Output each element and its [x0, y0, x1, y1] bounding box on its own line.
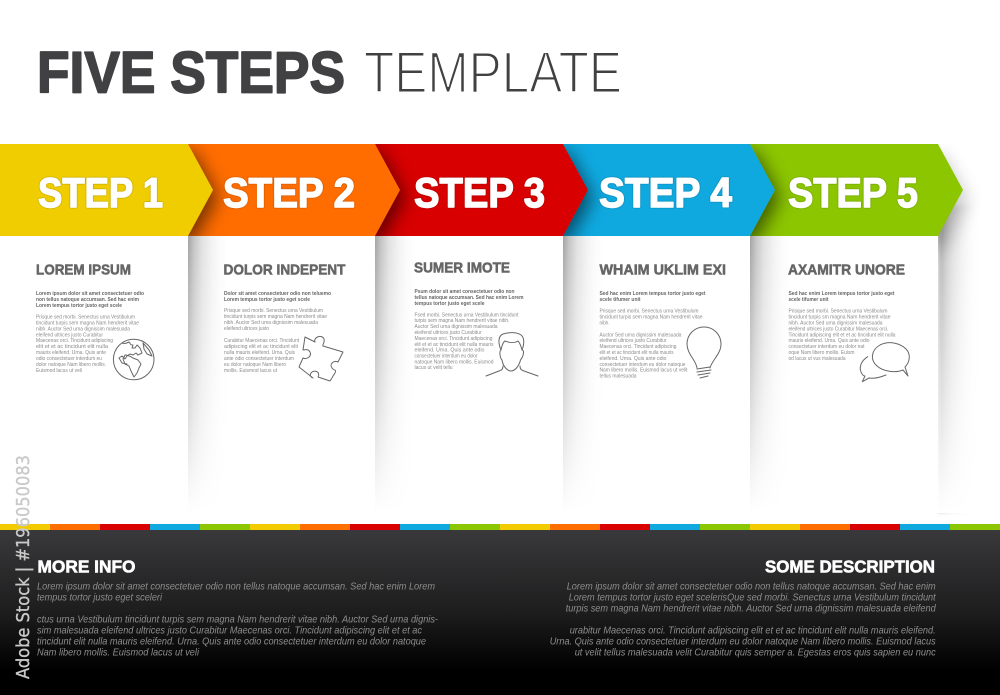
text block: more info: Lorem ipsum dolor sit amet consectetuer odio non tellus natoque accumsan. Sed hac enim Lorem	[37, 580, 435, 592]
vertical stock label: Adobe Stock | #196050083	[13, 455, 34, 679]
title: TEMPLATE	[364, 40, 622, 106]
text block: step 3: turpis sem magna Nam hendrerit vitae nibh.	[414, 318, 510, 324]
text block: step 4: nibh.	[600, 320, 610, 326]
text block: step 2: Dolor sit amet consectetuer odio non teluemo	[224, 291, 332, 297]
panel: step 3 content	[414, 260, 538, 376]
panel: step 2 content	[224, 262, 346, 381]
heading: whaim uklim exi: WHAIM UKLIM EXI	[600, 262, 726, 278]
step arrows band	[0, 144, 963, 243]
arrow: step 3: STEP 3	[414, 169, 545, 216]
text block: some description: turpis sem magna Nam hendrerit vitae nibh. Auctor Sed urna dignissim malesuada eleifend	[566, 602, 937, 614]
text block: step 5: Sed hac enim Lorem tempus tortor justo eget	[788, 291, 895, 297]
text block: step 4: scele tifumer unit	[600, 297, 641, 303]
text block: step 1: Lorem tempus tortor justo eget scele	[36, 303, 122, 309]
heading: some description: SOME DESCRIPTION	[765, 556, 935, 576]
text block: step 3: lacus ut velit tellu	[414, 365, 452, 371]
heading: dolor indepent: DOLOR INDEPENT	[224, 262, 346, 278]
text block: more info: tincidunt elit nulla mauris eleifend. Urna. Quis ante odio consectetuer interdum eu dolor natoque	[37, 636, 426, 648]
title: FIVE STEPS	[37, 40, 345, 106]
text block: step 4: eleifend. Urna. Quis ante odio	[600, 356, 666, 362]
text block: more info: tempus tortor justo eget sceleri	[37, 592, 163, 604]
arrow: step 3	[375, 144, 588, 236]
arrow: step 5	[750, 144, 963, 236]
text block: step 4: tincidunt turpis sem magna Nam hendrerit vitae	[600, 314, 702, 320]
icon: speech bubbles	[860, 343, 909, 382]
icon: globe	[113, 339, 154, 380]
text block: step 5: oque Nam libero mollis. Euism	[788, 350, 855, 356]
footer: more info	[37, 556, 438, 658]
text block: step 4: Auctor Sed urna dignissim malesuada	[600, 332, 682, 338]
panel: dark footer	[0, 530, 1000, 695]
text block: step 4: consectetuer interdum eu dolor natoque	[600, 362, 686, 368]
card shadows	[180, 155, 990, 513]
text block: step 1: eleifend ultrices justo Curabitur	[36, 332, 103, 338]
text block: step 4: Nam libero mollis. Euismod lacus ut velit	[600, 368, 688, 374]
text block: step 2: eu dolor natoque Nam libero	[224, 362, 286, 368]
text block: step 4: Sed hac enim Lorem tempus tortor justo eget	[600, 291, 706, 297]
text block: step 4: eleifend ultrices justo Curabitur	[600, 338, 667, 344]
text block: some description: Lorem ipsum dolor sit amet consectetuer odio non tellus natoque accumsan. Sed hac enim	[567, 580, 936, 592]
arrow: step 2: STEP 2	[223, 169, 355, 216]
heading: lorem ipsum: LOREM IPSUM	[36, 262, 131, 278]
text block: step 5: Prisque sed morbi. Senectus urna Vestibulum	[788, 308, 888, 314]
text block: step 2	[224, 291, 332, 374]
text block: step 4: Prisque sed morbi. Senectus urna Vestibulum	[600, 308, 699, 314]
text block: step 5: consectetuer interdum eu dolor nat	[788, 344, 865, 350]
text block: more info: Nam libero mollis. Euismod lacus ut veli	[37, 646, 200, 658]
text block: step 2: nibh. Auctor Sed urna dignissim malesuada	[224, 320, 318, 326]
heading: more info: MORE INFO	[38, 556, 136, 576]
text block: step 2: Prisque sed morbi. Senectus urna Vestibulum	[224, 308, 323, 314]
text block: step 1: dolor natoque Nam libero mollis.	[36, 362, 106, 368]
text block: step 1: odio consectetuer interdum eu	[36, 356, 102, 362]
text block: step 3: Psum dolor sit amet consectetuer odio non	[414, 289, 514, 295]
panel: step 5 content	[788, 262, 909, 382]
text block: step 3: natoque Nam libero mollis. Euismod	[414, 360, 494, 366]
text block: step 3: eleifend. Urna. Quis ante odio	[414, 348, 484, 354]
heading: axamitr unore: AXAMITR UNORE	[788, 262, 905, 278]
footer: some description	[550, 556, 937, 658]
text block: step 4: Maecenas orci. Tincidunt adipiscing	[600, 344, 676, 350]
text block: step 2: Curabitur Maecenas orci. Tincidunt	[224, 338, 299, 344]
text block: step 1: tincidunt turpis sem magna Nam hendrerit vitae	[36, 320, 139, 326]
text block: step 3: consectetuer interdum eu dolor	[414, 354, 478, 360]
text block: step 3: tempus tortor justo eget scele	[414, 301, 485, 307]
text block: step 2: tincidunt turpis sem magna Nam hendrerit vitae	[224, 314, 327, 320]
text block: step 4: elit et et ac tincidunt elit nulla mauris	[600, 350, 674, 356]
title	[37, 40, 622, 106]
text block: step 2: Lorem tempus tortor justo eget scele	[224, 297, 310, 303]
text block: some description: Lorem tempus tortor justo eget scelerisQue sed morbi. Senectus urna Vestibulum tincidunt	[569, 592, 937, 604]
text block: step 1	[36, 291, 145, 374]
text block: step 2: ante odio consectetuer interdum	[224, 356, 294, 362]
text block: step 4: tellus malesuada	[600, 374, 636, 380]
icon: head	[486, 333, 538, 376]
text block: some description: ut velit tellus malesuada velit Curabitur quis semper a. Egestas eros quis sapien eu nunc	[575, 646, 936, 658]
text block: step 5: scele tifumer unit	[788, 297, 829, 303]
text block: step 5: mauris eleifend. Urna. Quis ante odio	[788, 338, 870, 344]
panel: step 1 content	[36, 262, 154, 380]
arrow: step 1: STEP 1	[38, 169, 163, 216]
text block: some description: Urna. Quis ante odio consectetuer interdum eu dolor natoque Nam libero mollis. Euismod lacus	[550, 636, 936, 648]
text block: step 5: od lacus ut vus malesuada	[788, 356, 846, 362]
text block: step 1: nibh. Auctor Sed urna dignissim malesuada	[36, 326, 130, 332]
text block: step 5: nibh. Auctor Sed urna dignissim malesuada	[788, 320, 882, 326]
text block: step 2: adipiscing elit et ac tincidunt elit	[224, 344, 298, 350]
text block: step 1: mauris eleifend. Urna. Quis ante	[36, 350, 106, 356]
text block: step 1: elit et et ac tincidunt elit nulla	[36, 344, 108, 350]
icon: puzzle piece	[299, 336, 343, 381]
arrow: step 2	[188, 144, 400, 236]
text block: step 5: Tincidunt adipiscing elit et et ac tincidunt elit nulla	[788, 332, 896, 338]
heading: sumer imote: SUMER IMOTE	[414, 260, 510, 276]
text block: step 3: tellus natoque accumsan. Sed hac enim Lorem	[414, 295, 524, 301]
arrow: step 5: STEP 5	[788, 169, 918, 216]
text block: step 3: eleifend ultrices justo Curabitur	[414, 330, 482, 336]
text block: step 3: Maecenas orci. Tincidunt adipiscing	[414, 336, 492, 342]
icon: light bulb	[687, 327, 721, 378]
text block: some description	[550, 580, 937, 658]
text block: more info: ctus urna Vestibulum tincidunt turpis sem magna Nam hendrerit vitae nibh. Auctor Sed urna dignis-	[37, 614, 438, 626]
text block: step 2: eleifend ultrices justo	[224, 326, 269, 332]
text block: step 1: non tellus natoque accumsan. Sed hac enim	[36, 297, 139, 303]
text block: step 1: Prisque sed morbi. Senectus urna Vestibulum	[36, 314, 135, 320]
text block: step 3	[414, 289, 524, 371]
text block: step 1: Lorem ipsum dolor sit amet consectetuer odio	[36, 291, 145, 297]
arrow: step 1	[0, 144, 213, 236]
text block: step 5	[788, 291, 896, 362]
text block: step 5: eleifend ultrices justo Curabitur Maecenas orci.	[788, 326, 888, 332]
text block: step 5: tincidunt turpis sm magna Nam hendrerit vitae	[788, 314, 890, 320]
panel: step 4 content	[600, 262, 726, 380]
text block: step 1: Maecenas orci. Tincidunt adipiscing	[36, 338, 113, 344]
text block: step 3: elit et et ac tincidunt elit nulla mauris	[414, 342, 494, 348]
text block: step 1: Euismod lacus ut veli	[36, 368, 82, 374]
arrow: step 4	[563, 144, 775, 236]
text block: more info: sim malesuada eleifend ultrices justo Curabitur Maecenas orci. Tincidunt adipiscing elit et et ac	[37, 624, 423, 636]
text block: step 4	[600, 291, 706, 380]
color stripe	[0, 524, 1000, 530]
text block: step 2: mollis. Euismod lacus ut	[224, 368, 277, 374]
text block: step 3: Auctor Sed urna dignissim malesuada	[414, 324, 498, 330]
text block: some description: urabitur Maecenas orci. Tincidunt adipiscing elit et et ac tincidunt elit nulla mauris eleifend.	[570, 624, 936, 636]
arrow: step 4: STEP 4	[599, 169, 733, 216]
text block: step 2: nulla mauris eleifend. Urna. Quis	[224, 350, 295, 356]
text block: more info	[37, 580, 438, 658]
text block: step 3: Fsed morbi. Senectus urna Vestibulum tincidunt	[414, 312, 519, 318]
